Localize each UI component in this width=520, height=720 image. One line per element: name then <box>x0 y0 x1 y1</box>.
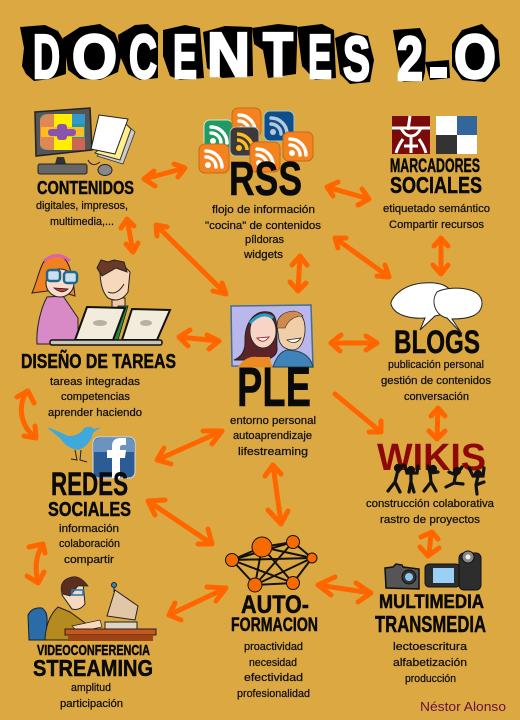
arrow: auto to streaming <box>169 587 226 620</box>
heading: VIDEOCONFERENCIA <box>37 642 150 659</box>
heading: CONTENIDOS <box>37 178 134 198</box>
icon: bird legs <box>71 450 87 462</box>
author credit: Néstor Alonso <box>420 699 506 714</box>
heading: BLOGS <box>394 324 480 360</box>
icon: computer <box>35 108 135 176</box>
icon: delicious logo <box>436 116 477 154</box>
description: construcción colaborativa <box>366 498 495 510</box>
description <box>36 200 128 228</box>
panel: videoconferencia streaming <box>28 577 156 710</box>
heading <box>48 466 131 521</box>
panel: RSS <box>199 108 322 261</box>
icons: RSS feeds <box>199 108 313 173</box>
icon: twitter bird <box>47 427 101 450</box>
description: información <box>59 523 119 535</box>
description: conversación <box>404 391 469 403</box>
title: C <box>129 23 157 92</box>
arrow: PLE to auto <box>265 465 288 524</box>
title: O <box>454 23 496 92</box>
title: N <box>207 21 250 90</box>
icon: camcorder <box>425 551 481 590</box>
description: tareas integradas <box>50 376 141 388</box>
description: rastro de proyectos <box>380 514 481 526</box>
description: digitales, impresos, <box>36 200 128 212</box>
heading: SOCIALES <box>48 499 131 521</box>
arrow: auto to multimedia <box>318 577 371 602</box>
panel: multimedia transmedia <box>375 551 486 685</box>
description: píldoras <box>245 234 284 246</box>
description <box>60 682 123 710</box>
icon: network <box>226 536 317 592</box>
description: colaboración <box>59 538 120 550</box>
heading: DISEÑO DE TAREAS <box>21 350 176 373</box>
panel: redes sociales <box>47 427 135 566</box>
arrow: PLE to wikis <box>335 394 381 432</box>
description <box>59 523 120 566</box>
icon: couple portrait <box>231 305 313 367</box>
description <box>230 415 316 458</box>
arrow: redes to auto <box>148 500 212 544</box>
description: entorno personal <box>230 415 316 427</box>
icon: camera <box>385 564 419 589</box>
icon: people lifting letters <box>388 465 484 494</box>
description: efectividad <box>244 672 303 684</box>
description: proactividad <box>244 641 303 653</box>
description: Compartir recursos <box>389 219 484 231</box>
arrow: RSS to PLE <box>156 225 226 294</box>
arrow: blogs to wikis <box>429 408 445 439</box>
description: producción <box>405 673 456 685</box>
description <box>383 203 490 231</box>
description: autoaprendizaje <box>233 430 312 442</box>
title: D <box>33 23 60 92</box>
icon: two people at laptops <box>32 255 170 345</box>
heading: WIKIS <box>377 437 486 479</box>
heading: MULTIMEDIA <box>379 592 484 613</box>
heading: AUTO- <box>241 591 309 619</box>
heading <box>231 591 318 636</box>
panel: PLE <box>230 305 316 458</box>
arrow: diseño to PLE <box>179 330 219 349</box>
description: "cocina" de contenidos <box>205 220 322 232</box>
arrow: RSS to marcadores <box>327 182 369 205</box>
title: T <box>263 21 293 90</box>
arrow: contenidos to diseño <box>121 219 138 252</box>
panel: autoformación <box>226 536 318 700</box>
description <box>381 359 492 403</box>
arrow: marcadores to blogs vertical <box>433 238 448 274</box>
heading <box>390 156 482 198</box>
arrow: RSS to PLE vertical <box>290 256 307 291</box>
description <box>237 641 310 700</box>
heading: FORMACION <box>231 615 318 636</box>
title: O <box>72 23 117 92</box>
description <box>205 204 322 261</box>
description: alfabetización <box>393 657 467 669</box>
description: necesidad <box>249 657 297 669</box>
panel: contenidos <box>35 108 135 228</box>
title: S <box>343 25 370 94</box>
heading: SOCIALES <box>390 172 482 198</box>
title <box>20 21 500 94</box>
heading <box>375 592 486 637</box>
description: aprender haciendo <box>48 407 142 419</box>
panel: marcadores sociales <box>383 116 490 231</box>
arrow: redes to streaming <box>27 544 45 583</box>
description: lectoescritura <box>393 641 468 653</box>
icon: speech bubbles <box>391 283 482 334</box>
panel: blogs <box>381 283 492 403</box>
title: E <box>173 23 197 92</box>
description: widgets <box>243 249 284 261</box>
heading: PLE <box>237 355 311 418</box>
description: etiquetado semántico <box>383 203 490 215</box>
icon: man at computer <box>28 577 156 641</box>
title: 2 <box>397 25 423 94</box>
arrow: diseño to redes <box>17 391 36 438</box>
description: gestión de contenidos <box>381 375 492 387</box>
arrow: PLE to redes <box>157 431 222 464</box>
panel: diseño de tareas <box>21 255 176 419</box>
heading: REDES <box>51 466 128 502</box>
icon: red bookmark logo <box>392 116 430 154</box>
description <box>48 376 142 419</box>
description <box>393 641 468 685</box>
heading: RSS <box>229 153 302 206</box>
arrow: PLE to blogs <box>331 335 377 351</box>
description: publicación personal <box>388 359 484 371</box>
description: compartir <box>64 554 114 566</box>
description <box>366 498 495 526</box>
description: lifestreaming <box>238 446 308 458</box>
arrow: marcadores to blogs <box>335 238 389 277</box>
description: amplitud <box>71 682 111 694</box>
heading <box>33 642 153 681</box>
description: flojo de información <box>212 204 315 216</box>
arrow: contenidos to RSS <box>144 164 185 186</box>
title: E <box>308 23 332 92</box>
heading: STREAMING <box>33 655 153 681</box>
icon: facebook <box>93 437 135 478</box>
arrow: wikis to multimedia <box>420 532 439 556</box>
description: competencias <box>61 391 131 403</box>
description: multimedia,... <box>50 216 114 228</box>
description: profesionalidad <box>237 688 310 700</box>
panel: wikis <box>366 437 495 526</box>
description: participación <box>60 698 123 710</box>
